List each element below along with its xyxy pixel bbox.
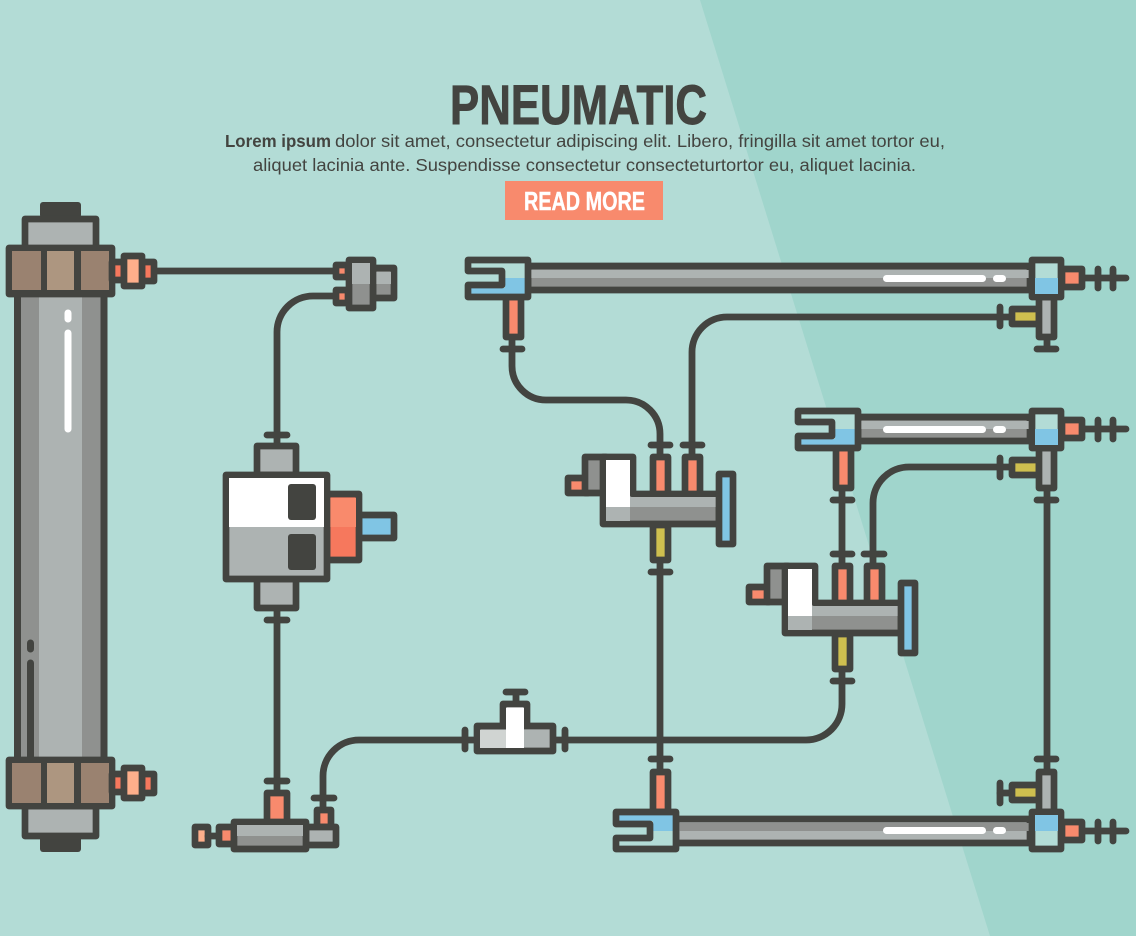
background diagonal panel (700, 0, 1136, 936)
central valve block (226, 446, 394, 608)
top stub (257, 446, 296, 475)
description text (225, 131, 945, 175)
orange outlet (327, 494, 359, 560)
description text: Lorem ipsum (225, 131, 331, 151)
cylinder top block (25, 219, 96, 249)
actuator 1 (568, 457, 733, 560)
grey port (1039, 448, 1054, 488)
rod (676, 819, 1030, 843)
middle cylinder (798, 411, 1126, 488)
top collar (9, 248, 112, 294)
bottom-left T fitting (195, 793, 336, 849)
inline T valve (477, 704, 553, 751)
fork head (616, 812, 676, 849)
blue outlet (359, 515, 394, 538)
cylinder bottom cap (40, 836, 81, 852)
cylinder tube (18, 295, 104, 759)
orange port (653, 772, 668, 812)
title: PNEUMATIC (450, 73, 707, 136)
actuator 2 (749, 566, 915, 669)
top long cylinder (468, 260, 1126, 337)
fork head (468, 260, 528, 297)
bottom long cylinder (616, 772, 1126, 849)
rod (858, 417, 1030, 441)
cylinder top cap (40, 202, 81, 218)
main block (226, 475, 327, 579)
pipes network (150, 271, 1047, 808)
plug fitting (336, 260, 394, 308)
yellow port (1012, 309, 1039, 324)
orange port (836, 448, 851, 488)
right head (1032, 260, 1061, 297)
read more button: READ MORE (524, 186, 645, 216)
read more button (505, 181, 663, 220)
end fitting (1062, 822, 1126, 841)
orange port (506, 297, 521, 337)
right head (1032, 812, 1061, 849)
bottom stub (257, 579, 296, 608)
end fitting (1062, 269, 1126, 288)
bottom collar (9, 760, 112, 806)
grey port (1039, 297, 1054, 337)
pipe t-bars (267, 307, 1056, 803)
large vertical cylinder (9, 202, 112, 852)
grey port (1039, 772, 1054, 812)
rod (528, 266, 1030, 290)
yellow port (1012, 785, 1039, 800)
yellow port (1012, 460, 1039, 475)
bottom-left connector (112, 768, 154, 798)
end fitting (1062, 420, 1126, 439)
top-left connector (112, 256, 154, 286)
description text: dolor sit amet, consectetur adipiscing elit. Libero, fringilla sit amet tortor eu, (335, 131, 945, 151)
description text: aliquet lacinia ante. Suspendisse consectetur consecteturtortor eu, aliquet lacinia. (253, 155, 916, 175)
cylinder bottom block (25, 806, 96, 836)
fork head (798, 411, 858, 448)
right head (1032, 411, 1061, 448)
